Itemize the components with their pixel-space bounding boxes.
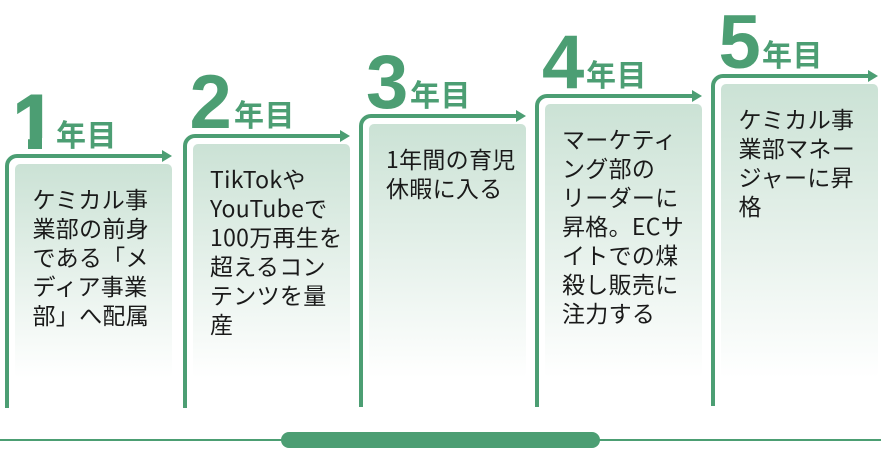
year 5 text: ケミカル事 [738, 101, 854, 135]
year 4 text: リーダーに [562, 179, 678, 213]
panel: year 1 [7, 80, 172, 408]
year 2 text: YouTubeで [209, 190, 327, 224]
panel: year 4 [537, 20, 702, 407]
year 5 heading: 年目 [762, 31, 823, 75]
year 4 heading: 4 [542, 20, 584, 105]
year 2 heading: 年目 [234, 91, 295, 135]
year 5 text [738, 101, 855, 222]
year 5 arrow frame [713, 70, 878, 406]
year 1 text: である「メ [32, 239, 149, 273]
year 4 text: ング部の [562, 150, 655, 184]
year 2 text: テンツを量 [210, 277, 326, 311]
year 3 text: 休暇に入る [386, 170, 502, 204]
year 2 text: TikTokや [210, 161, 306, 195]
year 4 text: 昇格。ECサ [562, 208, 684, 242]
timeline scrollbar pill [281, 432, 600, 448]
year 4 text: イトでの煤 [562, 237, 678, 271]
year 2 heading [190, 60, 295, 145]
year 1 text: ディア事業 [32, 268, 147, 302]
year 1 heading: 年目 [56, 111, 117, 155]
year 2 text [209, 161, 342, 340]
year 1 heading [17, 94, 112, 149]
year 1 text: 業部の前身 [32, 210, 149, 244]
year 1 text: ケミカル事 [32, 181, 148, 215]
year 5 text: ジャーに昇 [738, 159, 854, 193]
year 2 text: 100万再生を [210, 219, 342, 253]
year 4 card [545, 104, 702, 378]
year 5 heading: 5 [718, 0, 761, 85]
year 4 text: 注力する [562, 295, 655, 329]
year 5 card [721, 84, 878, 378]
year 2 text: 産 [210, 306, 233, 340]
year 3 arrow frame [361, 110, 526, 407]
year 2 card [193, 144, 350, 378]
year 4 arrow frame [537, 90, 702, 407]
year 1 arrow frame [7, 150, 172, 408]
year 1 heading: 1 [13, 80, 55, 165]
year 2 arrow frame [185, 130, 350, 408]
year 3 heading [366, 40, 471, 125]
panel: year 2 [185, 60, 350, 408]
year 3 text: 1年間の育児 [386, 141, 516, 175]
panel: year 3 [361, 40, 526, 407]
year 3 heading: 年目 [410, 71, 471, 115]
year 3 card [369, 124, 526, 378]
panel: year 5 [713, 0, 878, 406]
year 4 text: 殺し販売に [562, 266, 678, 300]
timeline [0, 432, 881, 448]
year 5 text: 格 [738, 188, 762, 222]
year 2 text: 超えるコン [210, 248, 326, 282]
year 4 heading [542, 20, 647, 105]
year 5 text: 業部マネー [738, 130, 855, 164]
year 5 heading [718, 0, 823, 85]
year 4 text [562, 121, 684, 329]
year 4 text: マーケティ [562, 121, 677, 155]
year 3 heading: 3 [366, 40, 408, 125]
year 3 text [386, 141, 516, 204]
year 1 card [15, 164, 172, 378]
year 1 text [32, 181, 149, 331]
year 4 heading: 年目 [586, 51, 647, 95]
year 1 text: 部」へ配属 [32, 297, 149, 331]
year 2 heading: 2 [190, 60, 232, 145]
